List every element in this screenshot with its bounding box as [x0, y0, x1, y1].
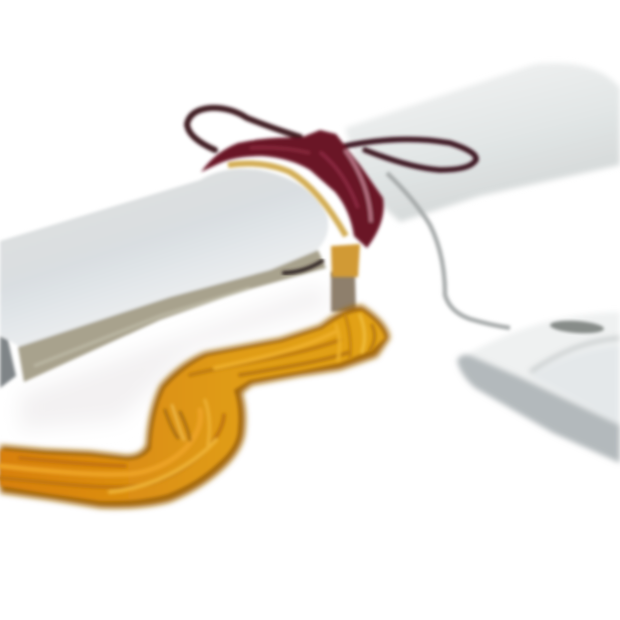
ribbon left loop — [187, 108, 300, 150]
scroll paper edge — [18, 250, 326, 382]
soft shadow under scroll — [20, 285, 330, 430]
tassel threads outline — [0, 305, 390, 508]
scroll: far section — [345, 63, 620, 222]
scroll end tip — [0, 336, 16, 388]
ribbon highlights — [320, 152, 358, 208]
ribbon under scroll — [284, 261, 322, 273]
golden edge under the ribbon — [228, 164, 346, 236]
tassel cap — [331, 244, 360, 277]
ribbon right loop — [340, 139, 476, 170]
computer mouse — [457, 312, 620, 463]
tassel threads fill — [0, 311, 385, 501]
mouse cord — [387, 173, 510, 328]
mouse scroll wheel — [550, 319, 604, 335]
ribbon bow — [187, 108, 476, 248]
tassel neck — [331, 272, 356, 312]
tassel — [0, 244, 390, 508]
scroll: near section — [0, 169, 328, 388]
ribbon band and tails — [201, 130, 384, 248]
tassel strands — [0, 315, 375, 492]
